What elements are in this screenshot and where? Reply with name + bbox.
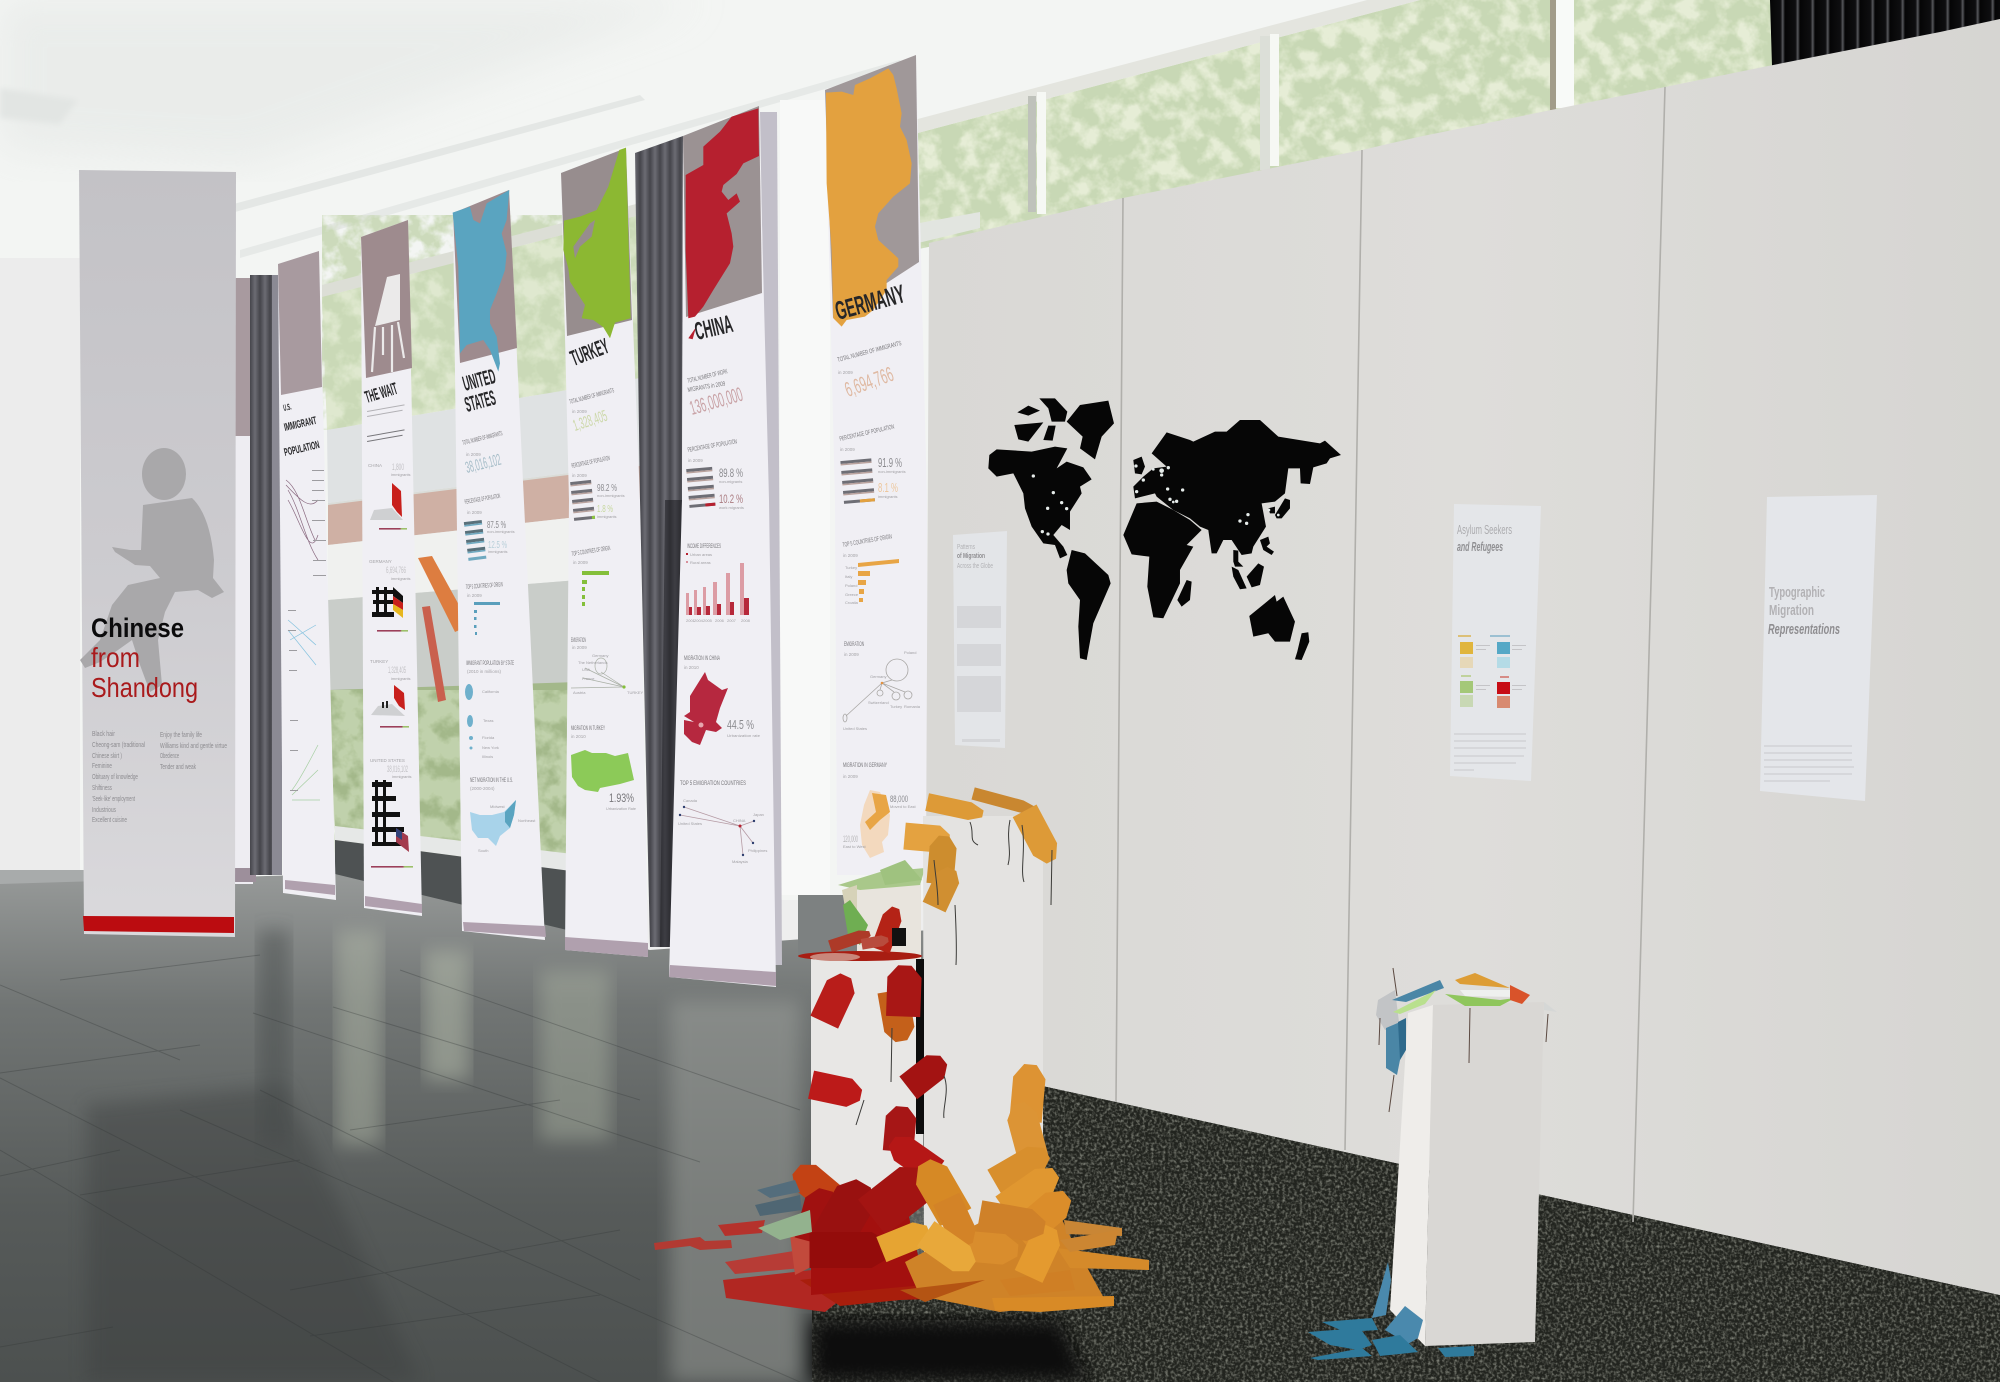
bar chart: income differences: 2001 [686,618,696,623]
poster: Patterns of Migration [953,531,1007,748]
percentage of population: 89.8 % [719,466,743,480]
bar chart: income differences: 2004 [694,618,704,623]
stereotype list: left: Obituary of knowledge [92,772,138,781]
bar chart: income differences: 2008 [741,618,751,623]
Germany wait: 6,694,766 [386,565,406,575]
migration in Turkey map: MIGRATION IN TURKEY [571,725,605,732]
light curtain beside China banner [760,112,782,965]
emigration network: Japan [753,812,764,817]
Africa [1123,502,1202,618]
poster body [1764,745,1854,782]
chart labels [288,470,326,791]
percentage of population [464,493,515,561]
intro text [367,404,405,442]
pedestal: back with green tags [838,860,925,962]
total migrants: 136,000,000 [687,384,745,420]
United States wait [370,758,413,868]
Turkey wait: immigrants [391,676,411,681]
North America [988,447,1092,558]
header block [361,220,412,378]
China wait: CHINA [368,463,382,468]
blue tags on floor [1308,1262,1474,1360]
title: CHINA [692,310,735,346]
immigrant population by state: Illinois [482,754,493,759]
percentage of population: 1.8 % [597,504,613,515]
bottom strip [365,896,422,913]
ceiling and back wall [0,0,2000,900]
percentage of population: non-immigrants [597,493,625,498]
map: Germany [826,68,912,327]
percentage of population: immigrants [878,494,898,499]
header block [683,106,762,317]
United States wait: immigrants [392,774,412,779]
percentage of population: immigrants [488,549,508,554]
immigrant population by state: New York [482,745,499,750]
emigration network: EMIGRATION [571,637,586,644]
migration in Germany map [843,762,916,858]
Eurasia [1133,420,1341,555]
poster body [1454,733,1526,771]
emigration network: Poland [904,650,916,655]
immigrant population by state: California [482,689,500,694]
banner: United States: TOTAL NUMBER OF IMMIGRANTS [462,430,504,447]
percentage of population: in 2009 [840,447,855,452]
total immigrants [462,430,504,477]
total immigrants: in 2009 [572,409,587,414]
poster title [1768,584,1840,638]
net migration map: (2000-2004) [470,786,495,791]
header block [453,190,517,363]
net migration map [470,777,536,853]
banner: United States: IMMIGRANT POPULATION BY STATE [466,660,514,667]
total immigrants: 1,328,405 [571,408,610,435]
title [282,401,321,459]
net migration map: South [478,848,488,853]
grey curtain left [250,275,282,875]
percentage of population: 87.5 % [487,520,506,531]
percentage of population: non-migrants [719,479,742,484]
banner: Turkey [561,148,648,957]
migration in Germany map: 120,000 [843,834,858,844]
emigration network: in 2009 [844,652,859,657]
hanging red tags [786,965,953,1215]
poster body [957,606,1001,742]
emigration network: Germany [592,653,608,658]
immigrant population by state: Texas [483,718,493,723]
tag pile on floor: blue and green [755,1180,812,1240]
percentage of population: non-immigrants [487,529,515,534]
percentage of population: in 2009 [572,473,587,478]
banner: United States: TOP 5 COUNTRIES OF ORIGIN [466,581,503,591]
United States wait: UNITED STATES [370,758,405,763]
banner: United States: 38,016,102 [464,452,503,477]
emigration network: TOP 5 EMIGRATION COUNTRIES [680,780,746,787]
emigration network: TURKEY [627,690,644,695]
migration in Turkey map [571,725,637,811]
Germany wait [369,559,411,632]
banner: United States: STATES [462,387,498,417]
stereotype list: left: 'Seek-like' employment [92,794,136,803]
immigrant population by state: Florida [482,735,495,740]
United States wait: 38,016,102 [387,764,408,774]
total immigrants: in 2009 [838,370,853,375]
banner: Germany [825,55,928,875]
stereotype list: left: Feminine [92,761,112,770]
total migrants: TOTAL NUMBER OF WORK [687,368,729,385]
top countries of origin: in 2009 [843,553,858,558]
top countries of origin: Italy [845,574,852,579]
emigration network: Romania [904,704,921,709]
banner: The Wait: THE WAIT [363,379,400,407]
stereotype list: right: Tender and weak [160,762,196,771]
emigration network: in 2009 [572,645,587,650]
migration in Turkey map: Urbanization Rate [606,806,637,811]
poster: Typographic Migration Representations [1760,495,1877,801]
Turkey wait [370,659,411,728]
emigration network: United States [678,821,702,826]
bottom strip [285,880,335,895]
banner: United States [453,190,546,940]
migration in China map: Urbanization rate [727,733,761,738]
percentage of population: PERCENTAGE OF POPULATION [687,438,738,454]
total immigrants: in 2009 [466,452,481,457]
wall panels [925,19,2000,1295]
header block [561,148,632,336]
total immigrants: TOTAL NUMBER OF IMMIGRANTS [837,340,903,364]
top countries of origin [466,581,503,635]
strings [1379,968,1548,1112]
Australia and New Zealand [1249,595,1309,660]
hanging strings [934,820,1052,965]
poster title: Migration [1769,602,1814,619]
title [460,365,498,417]
emigration network [571,637,644,695]
strings [856,1028,946,1125]
poster: Asylum Seekers and Refugees [1450,504,1541,781]
migration in Turkey map: in 2010 [571,734,586,739]
floor: grey tiles [0,874,930,1382]
poster title: and Refugees [1457,539,1503,554]
map: China [686,108,759,339]
migration in Germany map: MIGRATION IN GERMANY [843,762,887,769]
stereotype list: right: Obedience [160,751,179,760]
emigration network: Turkey [890,704,902,709]
emigration network: USA [582,667,591,672]
bottom strip [463,922,546,937]
bar chart: income differences: INCOME DIFFERENCES [687,543,721,550]
map: United States east [453,190,509,372]
banner: U.S. immigrant population [278,251,336,900]
banner: Turkey: TOP 5 COUNTRIES OF ORIGIN [571,545,611,558]
migration in Germany map: 88,000 [890,794,908,804]
immigrant population by state: (2010 in millions) [467,669,502,674]
colour swatches [1460,642,1510,708]
emigration network: EMIGRATION [844,641,864,648]
poster title: Across the Globe [957,561,993,570]
percentage of population [839,423,906,504]
emigration network: Malaysia [732,859,749,864]
poster title [957,542,993,570]
banner: China [669,106,776,987]
Germany wait: immigrants [391,576,411,581]
percentage of population: 12.5 % [488,540,507,551]
emigration network: United States [843,726,867,731]
map: Turkey [563,148,631,338]
panel seams [1116,87,1665,1222]
orange tags on top [903,787,1063,912]
percentage of population: work migrants [719,505,744,510]
migration in China map: 44.5 % [727,717,754,732]
percentage of population: immigrants [597,514,617,519]
poster title: of Migration [957,551,985,560]
top right black curtain [1770,0,2000,66]
China wait: 1,800 [392,462,404,472]
stereotype list: right: Williams kind and gentle virtue [160,741,227,750]
title: Shandong [91,672,198,703]
poster title: Patterns [957,542,975,551]
bar chart: income differences: 2007 [727,618,737,623]
emigration network: France [582,676,595,681]
percentage of population: non-immigrants [878,469,906,474]
tag pile on floor: red [654,1157,960,1312]
percentage of population [686,438,744,510]
stereotype list: left: Cheong-sam (traditional [92,740,145,749]
banner: Turkey: TOTAL NUMBER OF IMMIGRANTS [569,387,615,406]
percentage of population: in 2009 [467,510,482,515]
stereotype list: right [160,730,227,771]
world map cut-out [988,398,1341,660]
poster title: Representations [1768,621,1840,638]
immigrant population by state [465,660,514,759]
flow chart [286,480,320,800]
far banner mostly hidden [235,278,256,884]
silhouette of seated woman [80,448,224,692]
stereotype list: right: Enjoy the family life [160,730,202,739]
title: POPULATION [283,439,321,459]
header block [278,251,322,395]
red strip [83,916,234,933]
migration in Germany map: in 2009 [843,774,858,779]
banner: The Wait [361,220,422,916]
stereotype list: left: Excellent cuisine [92,815,127,824]
bar chart: income differences: Urban areas [690,552,712,557]
white column and window bench behind banners [780,100,858,955]
top countries of origin: Poland [845,583,857,588]
pedestal: right with blue tags [1308,968,1557,1360]
percentage of population: 98.2 % [597,483,617,494]
total immigrants: 6,694,766 [842,363,897,402]
stereotype list: left: Shiftiness [92,783,112,792]
percentage of population: 10.2 % [719,492,743,506]
percentage of population: 8.1 % [878,480,898,495]
total migrants [687,368,745,420]
migration in China map [684,655,761,745]
title: U.S. [282,401,292,413]
bar chart: income differences: 2005 [703,618,713,623]
title: from [91,642,140,673]
poster title: Asylum Seekers [1457,522,1512,537]
emigration network: CHINA [733,818,746,823]
migration in China map: in 2010 [684,665,699,670]
percentage of population: PERCENTAGE OF POPULATION [571,455,611,470]
emigration network: Germany [870,674,886,679]
migration in Germany map: Moved to East [890,804,916,809]
British Isles [1133,457,1145,474]
green tags [838,860,925,945]
emigration network: The Netherlands [578,660,608,665]
top countries of origin: Turkey [845,565,857,570]
total immigrants [569,387,615,435]
title: GERMANY [832,278,908,326]
percentage of population: 91.9 % [878,455,902,470]
percentage of population: PERCENTAGE OF POPULATION [839,423,895,443]
top red tags [798,904,922,961]
percentage of population [570,455,625,521]
pedestal: tall with orange tags [903,787,1063,1268]
China wait: immigrants [391,472,411,477]
top countries of origin [571,545,611,606]
China wait [368,462,411,530]
top countries of origin: Croatia [845,600,859,605]
net migration map: NET MIGRATION IN THE U.S. [470,777,513,784]
rear windows, concrete band and outdoors [322,203,640,955]
city pins [1032,464,1280,536]
stereotype list: left: Industrious [92,805,116,814]
emigration network: Switzerland [868,700,889,705]
top countries of origin: in 2009 [573,560,588,565]
top countries of origin [842,533,899,605]
bar chart: income differences: 2006 [715,618,725,623]
Asian and Pacific islands [1177,498,1290,607]
top countries of origin: TOP 5 COUNTRIES OF ORIGIN [842,533,893,549]
bar chart: income differences [686,543,751,623]
emigration network: Austria [573,690,586,695]
pedestal: red tags [786,904,953,1215]
Greenland and Arctic islands [1014,398,1114,459]
top countries of origin: in 2009 [467,593,482,598]
Turkey wait: TURKEY [370,659,388,664]
migration in China map: MIGRATION IN CHINA [684,655,720,662]
bottom strip [669,965,776,986]
emigration network [678,780,767,864]
bar chart: income differences: Rural areas [690,560,711,565]
net migration map: Northeast [518,818,536,823]
title: IMMIGRANT [283,415,318,434]
stereotype list: left: Chinese skirt ) [92,751,122,760]
emigration network: Philippines [748,848,767,853]
stereotype list: left: Black hair [92,729,115,738]
total immigrants [837,340,903,402]
total migrants: MIGRANTS in 2009 [687,380,726,394]
banner: United States: UNITED [460,365,498,396]
South America [1067,550,1111,660]
banner: Chinese from Shandong [79,170,236,937]
dark speckled floor [812,1086,2000,1382]
migration in Germany map: East to West [843,844,866,849]
grey curtain centre [635,136,683,947]
top countries of origin: Greece [845,592,859,597]
Germany wait: GERMANY [369,559,392,564]
percentage of population: in 2009 [688,458,703,463]
banner: Turkey: TURKEY [567,333,612,371]
emigration network [843,641,921,731]
header block [825,55,919,318]
poster title: Typographic [1769,584,1825,601]
tag pile on floor: orange [876,1063,1149,1312]
swatch labels [1458,635,1526,690]
icon: chair [372,274,404,372]
emigration network: Canada [683,798,698,803]
percentage of population: PERCENTAGE OF POPULATION [464,493,501,506]
net migration map: Midwest [490,804,506,809]
upper windows with trees [914,0,1772,250]
title: Chinese [91,613,184,643]
migration in Turkey map: 1.93% [609,791,634,805]
tags on top [1376,973,1557,1075]
Turkey wait: 1,328,405 [388,665,406,675]
title [91,613,198,703]
bottom strip [565,937,648,957]
poster title [1457,522,1512,554]
stereotype list: left [92,729,145,824]
